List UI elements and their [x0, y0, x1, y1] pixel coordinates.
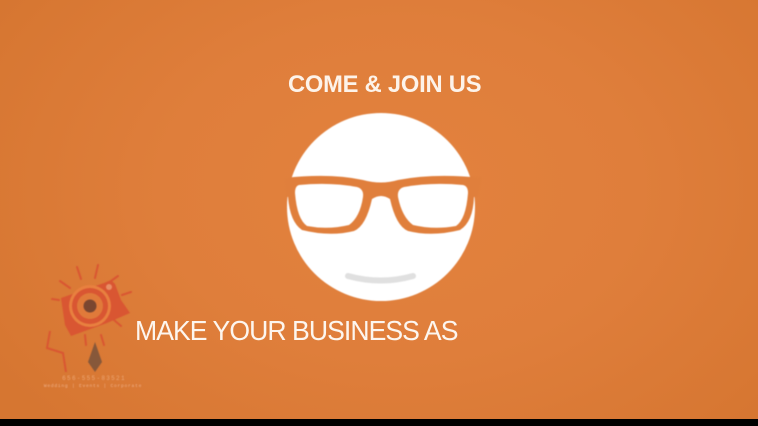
logo: camera watermark [44, 264, 142, 389]
right lens [398, 184, 468, 228]
subtitle text: MAKE YOUR BUSINESS AS [135, 315, 458, 346]
face circle [287, 113, 475, 301]
camera flash [106, 284, 112, 290]
camera body [61, 280, 130, 336]
glasses [285, 176, 481, 234]
tie [88, 342, 102, 372]
smile [348, 276, 413, 280]
glasses frame [285, 176, 481, 234]
rays [52, 265, 131, 345]
camera lens [69, 285, 111, 327]
left lens [295, 184, 363, 228]
tagline: Wedding | Events | Corporate [44, 383, 142, 389]
title: COME & JOIN US [288, 72, 481, 98]
lower arm line [47, 331, 66, 372]
icon: smiley face with glasses [286, 112, 476, 302]
phone number: 656-555-83521 [62, 375, 126, 382]
